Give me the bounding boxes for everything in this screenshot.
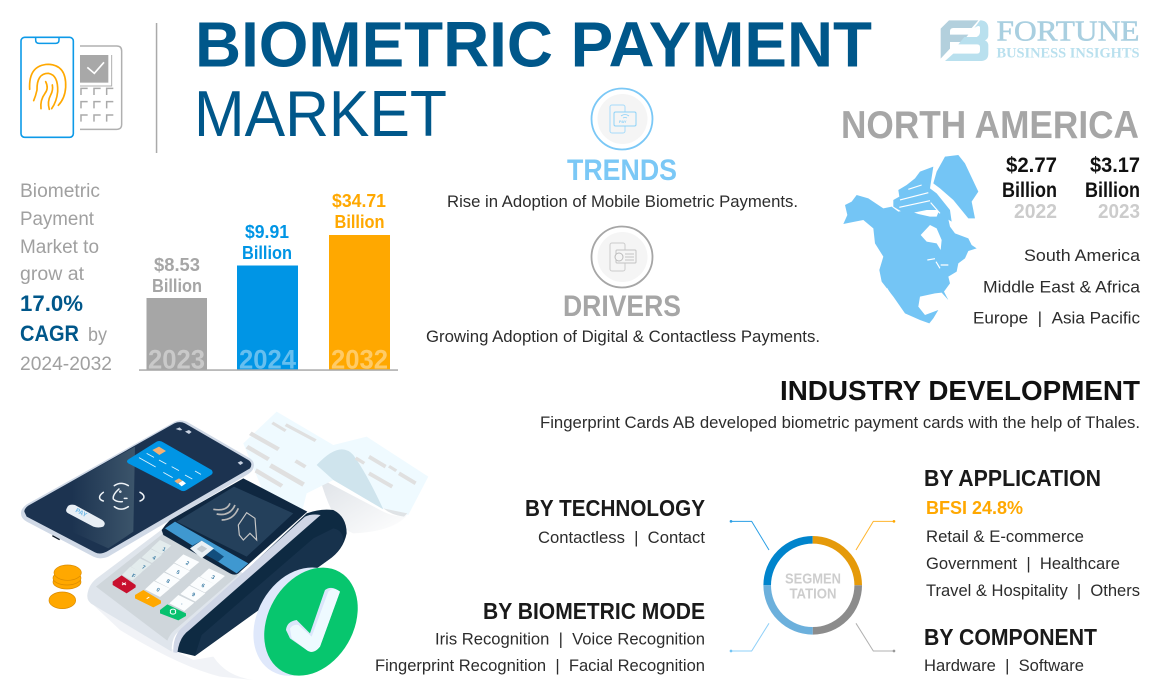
donut label: SEGMEN bbox=[785, 570, 841, 588]
other regions list: South America bbox=[1024, 246, 1141, 265]
icon: drivers bbox=[592, 226, 652, 288]
title bbox=[194, 8, 872, 150]
text: CAGR statement: 2024-2032 bbox=[20, 354, 112, 375]
icon: trends: PAY bbox=[619, 119, 627, 124]
bar 2024: $9.91 bbox=[245, 221, 289, 242]
success check badge bbox=[234, 550, 377, 693]
drivers text: DRIVERS bbox=[563, 290, 681, 323]
bar 2032 bbox=[329, 190, 390, 374]
logo: Fortune Business Insights: BUSINESS INSIGHTS bbox=[996, 46, 1140, 62]
keypad digits: 6 bbox=[200, 583, 206, 589]
text: CAGR statement: grow at bbox=[20, 264, 85, 285]
stat: 2022 value: 2022 bbox=[1014, 201, 1057, 223]
text: CAGR statement bbox=[20, 181, 112, 375]
segment: by application: BFSI 24.8% bbox=[926, 498, 1023, 518]
donut label: TATION bbox=[790, 586, 836, 602]
industry development: Fingerprint Cards AB developed biometric payment cards with the help of Thales. bbox=[540, 413, 1140, 432]
segment: by component: BY COMPONENT bbox=[924, 624, 1097, 650]
bar 2032: Billion bbox=[334, 211, 384, 232]
bar 2023: 2023 bbox=[148, 344, 205, 374]
keypad digits: F bbox=[130, 573, 137, 580]
bar chart: market size bbox=[139, 190, 398, 374]
bar 2024 bbox=[237, 221, 298, 374]
illustration: payment terminal with phone bbox=[21, 412, 428, 693]
keypad digits: 0 bbox=[155, 587, 161, 594]
text: CAGR statement: 17.0% bbox=[20, 291, 83, 316]
trends text: TRENDS bbox=[567, 154, 677, 187]
text: CAGR statement: by bbox=[88, 325, 107, 346]
other regions list: Middle East & Africa bbox=[983, 278, 1141, 296]
segment: by technology bbox=[525, 495, 705, 547]
donut ring bbox=[767, 540, 858, 631]
segment: by biometric mode: BY BIOMETRIC MODE bbox=[483, 598, 705, 624]
stat: 2023 value: Billion bbox=[1085, 178, 1140, 202]
keypad digits bbox=[130, 546, 216, 607]
segment: by biometric mode: Iris Recognition | Voice Recognition bbox=[435, 630, 705, 648]
segment: by technology: BY TECHNOLOGY bbox=[525, 495, 705, 521]
stat: 2023 value: 2023 bbox=[1098, 201, 1140, 223]
trends text bbox=[447, 154, 798, 211]
segment: by component: Hardware | Software bbox=[924, 656, 1084, 675]
stat: 2022 value: Billion bbox=[1002, 178, 1057, 202]
terminal bbox=[87, 478, 347, 680]
industry development: INDUSTRY DEVELOPMENT bbox=[780, 375, 1140, 406]
divider bbox=[156, 23, 157, 153]
segment: by technology: Contactless | Contact bbox=[538, 528, 705, 547]
keypad digits: . bbox=[180, 600, 185, 607]
stat: 2022 value bbox=[1002, 153, 1057, 223]
terminal body bbox=[87, 528, 243, 652]
icon: phone with fingerprint and payment terminal bbox=[21, 37, 122, 137]
bar 2024: Billion bbox=[242, 242, 292, 263]
other regions list: Europe | Asia Pacific bbox=[973, 308, 1140, 328]
terminal dark side bbox=[176, 510, 347, 656]
ground shadow bbox=[93, 605, 253, 680]
segment: by application: BY APPLICATION bbox=[924, 465, 1101, 491]
map: North America bbox=[843, 155, 978, 323]
segmentation donut with leader lines bbox=[730, 520, 895, 652]
text: CAGR statement: Payment bbox=[20, 209, 95, 230]
icon: trends bbox=[592, 88, 652, 150]
logo: Fortune Business Insights bbox=[941, 16, 1140, 62]
leader lines bbox=[730, 520, 895, 652]
stat: 2023 value bbox=[1085, 153, 1140, 223]
stat: 2023 value: $3.17 bbox=[1090, 153, 1140, 177]
industry development bbox=[540, 375, 1140, 432]
phone bbox=[21, 420, 254, 558]
keypad action buttons bbox=[113, 575, 186, 620]
text: CAGR statement: CAGR bbox=[20, 321, 79, 346]
logo: Fortune Business Insights: FORTUNE bbox=[996, 16, 1140, 48]
segment: by biometric mode: Fingerprint Recognition | Facial Recognition bbox=[375, 656, 705, 675]
keypad bbox=[122, 540, 225, 611]
keypad digits: 2 bbox=[184, 560, 190, 567]
bar 2032: 2032 bbox=[331, 344, 388, 374]
keypad digits: 8 bbox=[165, 578, 171, 585]
trends text: Rise in Adoption of Mobile Biometric Payments. bbox=[447, 192, 798, 211]
drivers text bbox=[426, 290, 820, 346]
terminal screen bbox=[162, 478, 307, 575]
segment: by biometric mode bbox=[375, 598, 705, 675]
keypad digits: 3 bbox=[210, 574, 216, 581]
keypad digits: 5 bbox=[175, 569, 181, 576]
keypad digits: 4 bbox=[151, 555, 157, 562]
donut label bbox=[785, 570, 841, 602]
drivers text: Growing Adoption of Digital & Contactless Payments. bbox=[426, 327, 820, 346]
segment: by application: Government | Healthcare bbox=[926, 554, 1120, 573]
title: BIOMETRIC PAYMENT bbox=[195, 8, 872, 80]
segment: by application: Travel & Hospitality | Others bbox=[926, 581, 1140, 600]
keypad digits: 9 bbox=[190, 592, 196, 598]
bar 2023: $8.53 bbox=[154, 254, 200, 275]
text: CAGR statement: Biometric bbox=[20, 181, 100, 202]
stat: 2022 value: $2.77 bbox=[1006, 153, 1057, 177]
keypad digits: 1 bbox=[161, 546, 167, 553]
coins bbox=[49, 565, 81, 609]
segment: by application: Retail & E-commerce bbox=[926, 527, 1084, 546]
segment: by application bbox=[924, 465, 1140, 600]
other regions list bbox=[973, 246, 1141, 328]
phone: PAY bbox=[74, 507, 89, 519]
bar 2023 bbox=[146, 254, 207, 374]
segment: by component bbox=[924, 624, 1097, 675]
title: MARKET bbox=[194, 77, 447, 150]
bar 2024: 2024 bbox=[239, 344, 296, 374]
keypad digits: 7 bbox=[141, 564, 146, 571]
bar 2023: Billion bbox=[152, 275, 202, 296]
text: CAGR statement: Market to bbox=[20, 237, 99, 258]
receipt bbox=[243, 412, 428, 533]
bar 2032: $34.71 bbox=[332, 190, 386, 211]
